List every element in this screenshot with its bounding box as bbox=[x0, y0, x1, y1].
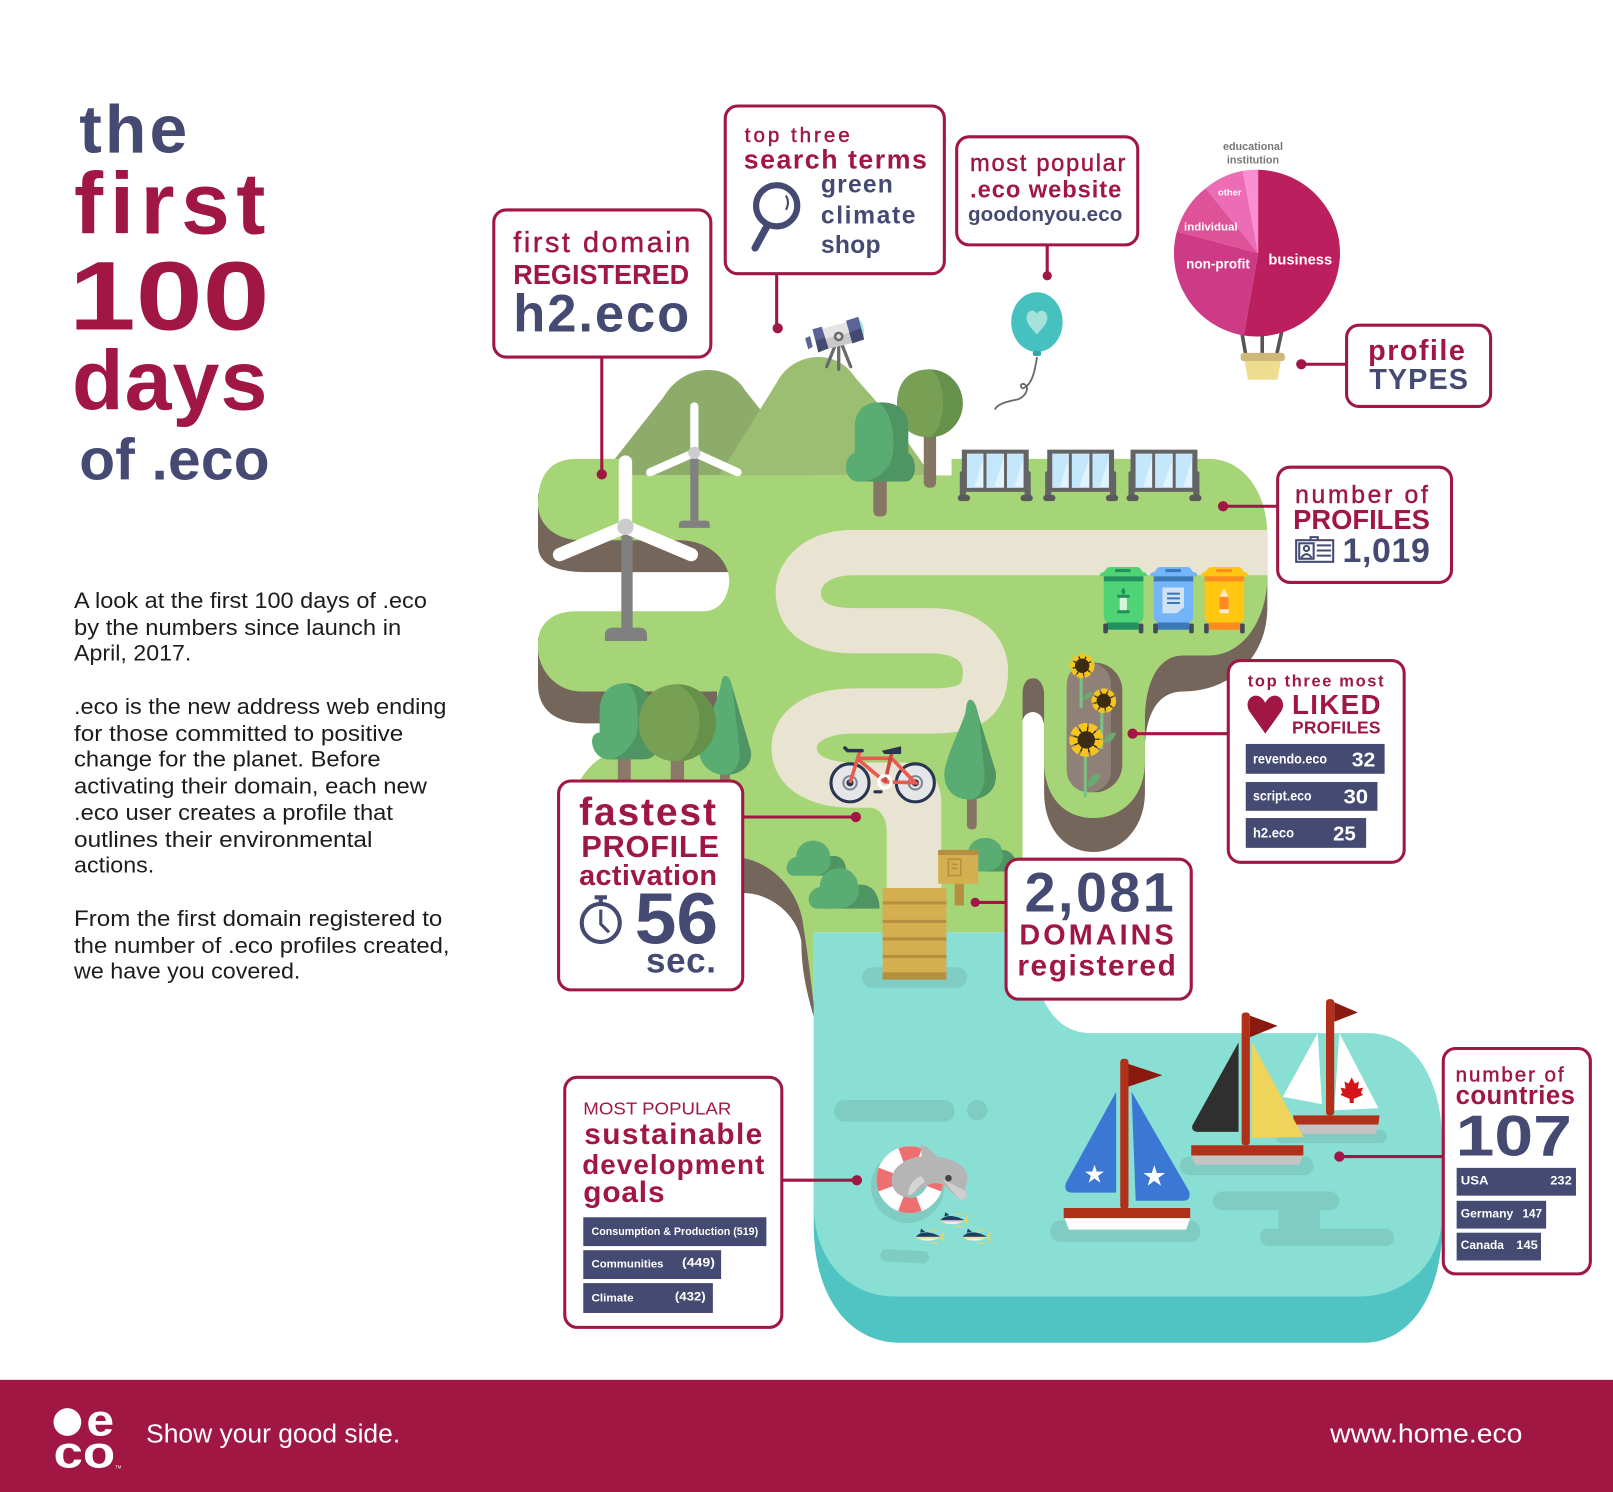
callout: top three most liked profiles: top three most bbox=[1248, 672, 1384, 690]
callout: top three most liked profiles: PROFILES bbox=[1292, 718, 1381, 738]
title: of .eco bbox=[79, 427, 270, 492]
callout: number of profiles bbox=[1218, 467, 1451, 582]
callout: number of countries: USA bbox=[1461, 1173, 1489, 1187]
callout: number of countries: 147 bbox=[1522, 1206, 1542, 1220]
recycling bins bbox=[1100, 567, 1248, 633]
cone tree bbox=[944, 700, 996, 829]
callout: number of countries: 232 bbox=[1550, 1173, 1572, 1187]
callout: top three search terms: climate bbox=[821, 202, 916, 229]
hot air balloon: profile types pie chart: non-profit bbox=[1186, 257, 1250, 272]
callout: most popular .eco website: most popular bbox=[970, 151, 1126, 177]
callout: sustainable development goals: (432) bbox=[675, 1290, 706, 1304]
callout: top three search terms: green bbox=[821, 171, 893, 198]
callout: profile types: profile bbox=[1368, 335, 1465, 367]
water shadows bbox=[834, 1100, 1394, 1264]
callout: sustainable development goals: sustainable bbox=[584, 1118, 762, 1151]
callout: number of countries bbox=[1334, 1049, 1590, 1274]
callout: sustainable development goals: Consumption & Production (519) bbox=[592, 1226, 758, 1238]
callout: fastest profile activation: fastest bbox=[579, 791, 716, 834]
intro text bbox=[73, 588, 450, 984]
intro text: .eco user creates a profile that bbox=[74, 800, 394, 825]
callout: sustainable development goals: (449) bbox=[682, 1256, 715, 1270]
footer: Show your good side. bbox=[146, 1421, 400, 1449]
mountains bbox=[602, 357, 931, 475]
callout: first domain registered: REGISTERED bbox=[513, 259, 689, 290]
callout: fastest profile activation: 56 bbox=[635, 880, 718, 960]
callout: domains registered: 2,081 bbox=[1025, 862, 1174, 924]
footer bbox=[0, 1380, 1613, 1492]
telescope bbox=[805, 317, 864, 369]
callout: number of countries: countries bbox=[1456, 1082, 1575, 1110]
callout: first domain registered bbox=[494, 210, 711, 479]
callout: fastest profile activation: PROFILE bbox=[581, 829, 719, 864]
hot air balloon: profile types pie chart bbox=[1174, 141, 1340, 380]
hot air balloon: profile types pie chart: other bbox=[1218, 188, 1242, 198]
callout: top three most liked profiles: revendo.eco bbox=[1253, 751, 1327, 766]
callout: fastest profile activation: sec. bbox=[646, 941, 716, 980]
icon: maple leaf bbox=[1340, 1077, 1363, 1103]
callout: first domain registered: first domain bbox=[513, 227, 690, 259]
callout: top three most liked profiles: script.eco bbox=[1253, 789, 1312, 804]
road bbox=[794, 553, 1267, 895]
wind turbines bbox=[560, 406, 738, 641]
callout: top three search terms: search terms bbox=[744, 145, 927, 175]
pier bbox=[862, 888, 967, 988]
callout: most popular .eco website: .eco website bbox=[970, 178, 1121, 204]
water bbox=[814, 932, 1442, 1343]
flower bed with sunflowers bbox=[1067, 656, 1122, 797]
trees upper bbox=[846, 369, 963, 517]
island land bbox=[538, 459, 1267, 1017]
intro text: outlines their environmental bbox=[74, 827, 372, 852]
callout: top three most liked profiles: h2.eco bbox=[1253, 826, 1294, 841]
intro text: A look at the first 100 days of .eco bbox=[74, 588, 427, 613]
intro text: .eco is the new address web ending bbox=[74, 694, 446, 719]
callout: top three most liked profiles: 25 bbox=[1333, 823, 1356, 846]
hot air balloon: profile types pie chart: institution bbox=[1227, 155, 1279, 167]
balloon bbox=[995, 292, 1063, 410]
callout: most popular .eco website bbox=[957, 137, 1138, 280]
footer: www.home.eco bbox=[1329, 1421, 1522, 1449]
intro text: actions. bbox=[74, 853, 154, 878]
boat: blue with stars: ★ bbox=[1142, 1160, 1167, 1191]
callout: profile types bbox=[1296, 325, 1491, 406]
callout: top three most liked profiles: 32 bbox=[1352, 749, 1375, 772]
callout: profile types: TYPES bbox=[1369, 364, 1468, 396]
hot air balloon: profile types pie chart: individual bbox=[1184, 221, 1238, 233]
logo bbox=[53, 1396, 122, 1477]
intro text: April, 2017. bbox=[74, 641, 191, 666]
title bbox=[69, 92, 270, 492]
icon: stopwatch bbox=[582, 897, 620, 942]
callout: number of profiles: 1,019 bbox=[1342, 532, 1430, 570]
callout: top three most liked profiles: 30 bbox=[1343, 786, 1368, 809]
callout: fastest profile activation: activation bbox=[579, 860, 717, 892]
callout: top three search terms: shop bbox=[821, 232, 881, 259]
callout: number of profiles: number of bbox=[1295, 482, 1428, 509]
hot air balloon: profile types pie chart: educational bbox=[1223, 141, 1283, 153]
logo: e bbox=[86, 1396, 114, 1445]
lifebuoy and dolphin bbox=[871, 1144, 967, 1223]
intro text: by the numbers since launch in bbox=[74, 615, 401, 640]
callout: top three most liked profiles bbox=[1127, 661, 1404, 862]
callout: most popular .eco website: goodonyou.eco bbox=[968, 203, 1122, 226]
icon: heart bbox=[1248, 696, 1283, 734]
callout: number of countries: Canada bbox=[1461, 1238, 1504, 1252]
title: first bbox=[74, 155, 265, 253]
callout: number of profiles: PROFILES bbox=[1293, 504, 1430, 535]
boat: blue with stars: ★ bbox=[1083, 1161, 1106, 1188]
intro text: activating their domain, each new bbox=[74, 773, 428, 798]
icon: id card bbox=[1296, 537, 1333, 562]
callout: sustainable development goals: development bbox=[582, 1149, 764, 1180]
callout: sustainable development goals: MOST POPULAR bbox=[583, 1098, 731, 1118]
callout: number of countries: Germany bbox=[1461, 1206, 1513, 1220]
intro text: for those committed to positive bbox=[74, 721, 403, 746]
callout: domains registered: DOMAINS bbox=[1019, 920, 1174, 952]
callout: first domain registered: h2.eco bbox=[513, 285, 689, 343]
intro text: From the first domain registered to bbox=[74, 906, 442, 931]
hot air balloon: profile types pie chart: business bbox=[1268, 252, 1332, 268]
callout: sustainable development goals: goals bbox=[583, 1176, 665, 1209]
callout: number of countries: 107 bbox=[1456, 1105, 1572, 1169]
callout: sustainable development goals: Climate bbox=[592, 1293, 634, 1305]
boat: blue with stars bbox=[1050, 1059, 1200, 1242]
intro text: we have you covered. bbox=[73, 959, 300, 984]
callout: sustainable development goals bbox=[565, 1077, 862, 1327]
fish school bbox=[916, 1212, 991, 1243]
intro text: change for the planet. Before bbox=[74, 747, 381, 772]
icon: magnifying glass bbox=[755, 185, 797, 248]
intro text: the number of .eco profiles created, bbox=[74, 933, 450, 958]
callout: top three search terms: top three bbox=[745, 124, 850, 147]
callout: number of countries: number of bbox=[1456, 1063, 1564, 1086]
bicycle bbox=[831, 747, 934, 802]
boat: white with Canadian flag bbox=[1276, 999, 1387, 1143]
callout: number of countries: 145 bbox=[1516, 1238, 1538, 1252]
bushes bbox=[787, 838, 1018, 909]
title: 100 bbox=[69, 241, 270, 350]
logo: co bbox=[53, 1428, 115, 1477]
solar panels bbox=[958, 450, 1202, 501]
signpost bbox=[938, 850, 978, 905]
callout: domains registered bbox=[971, 859, 1191, 999]
callout: top three most liked profiles: LIKED bbox=[1292, 689, 1381, 720]
logo: TM bbox=[115, 1464, 122, 1469]
callout: sustainable development goals: Communities bbox=[592, 1259, 664, 1271]
callout: fastest profile activation bbox=[559, 781, 861, 990]
title: days bbox=[72, 334, 267, 428]
boat: black and yellow bbox=[1180, 1013, 1314, 1175]
title: the bbox=[79, 92, 187, 167]
callout: domains registered: registered bbox=[1017, 949, 1176, 982]
callout: top three search terms bbox=[725, 106, 944, 333]
trees lower left bbox=[592, 676, 751, 787]
